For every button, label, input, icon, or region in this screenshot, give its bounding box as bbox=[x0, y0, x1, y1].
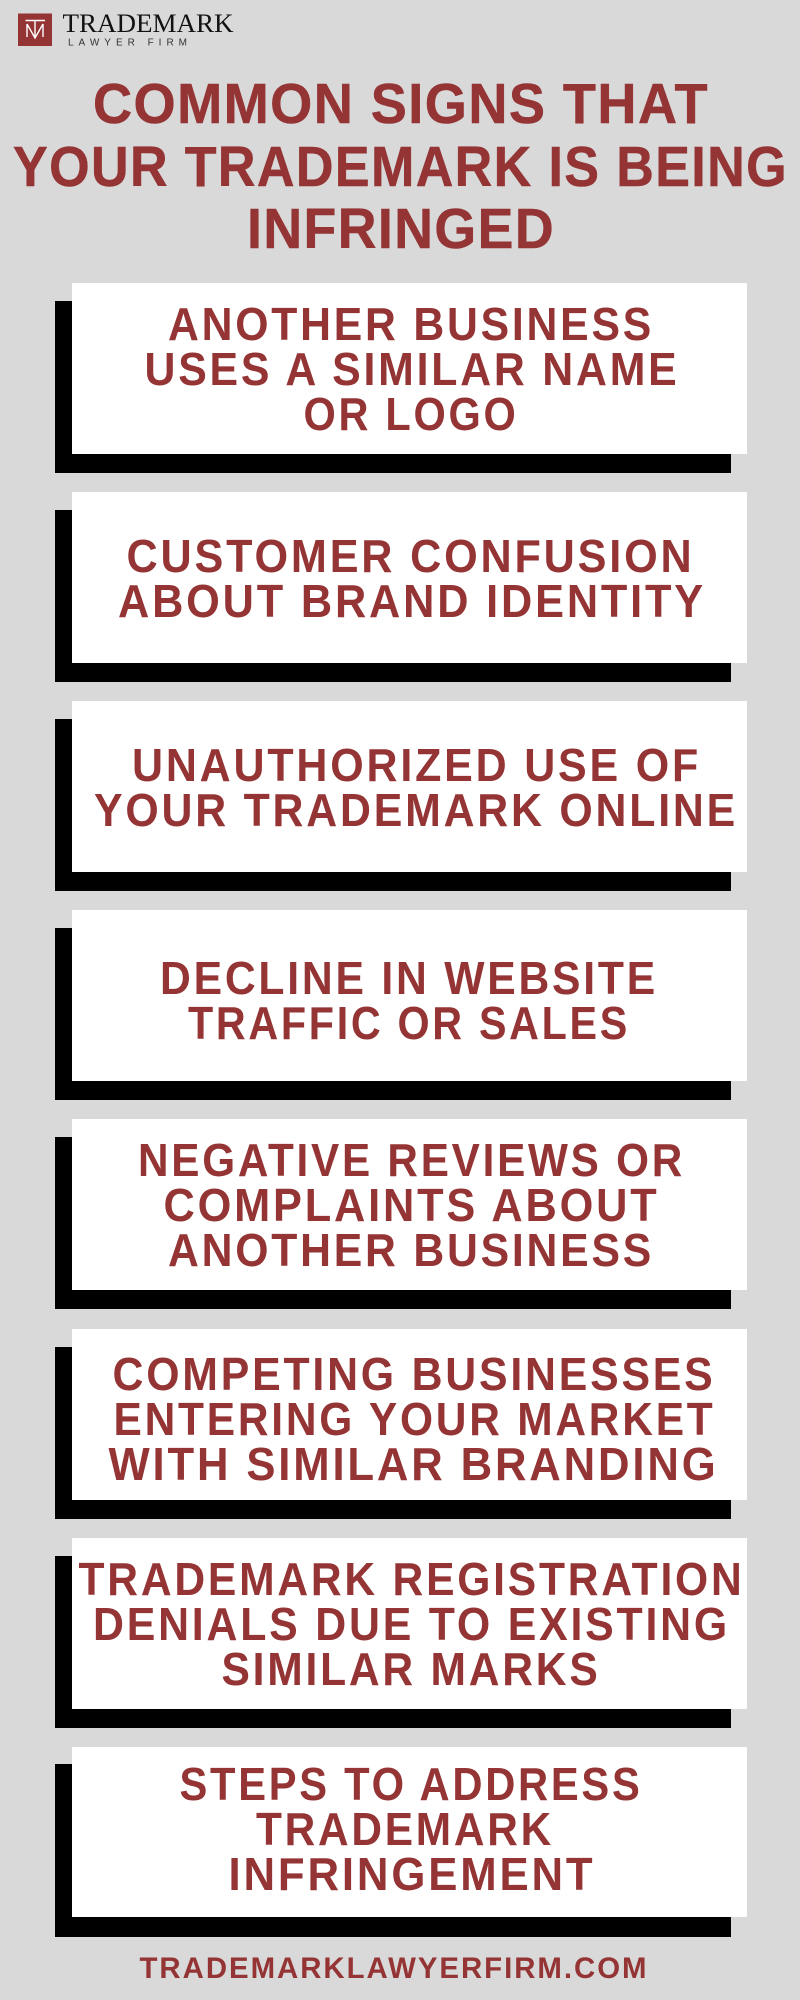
panel: unauthorized online use bbox=[55, 701, 747, 891]
panel text bbox=[160, 952, 658, 1049]
panel: similar name or logo bbox=[55, 283, 747, 473]
panel text: TRADEMARK REGISTRATION bbox=[78, 1553, 744, 1605]
panel text: INFRINGEMENT bbox=[228, 1848, 596, 1900]
panel: customer confusion bbox=[55, 492, 747, 682]
footer website: TRADEMARKLAWYERFIRM.COM bbox=[140, 1952, 648, 1985]
panel text: ANOTHER BUSINESS bbox=[168, 298, 654, 350]
panel text bbox=[144, 298, 680, 440]
panel text: STEPS TO ADDRESS bbox=[180, 1758, 642, 1810]
panel text: TRADEMARK bbox=[256, 1803, 554, 1855]
panel: negative reviews bbox=[55, 1119, 747, 1309]
panel text: DECLINE IN WEBSITE bbox=[160, 952, 658, 1004]
panel: steps to address infringement bbox=[55, 1747, 747, 1937]
panel: competing businesses bbox=[55, 1329, 747, 1519]
panel text: UNAUTHORIZED USE OF bbox=[132, 739, 701, 791]
logo wordmark: TRADEMARK bbox=[62, 9, 234, 38]
panel text: ANOTHER BUSINESS bbox=[168, 1224, 654, 1276]
title: INFRINGED bbox=[247, 197, 555, 261]
panel: registration denials bbox=[55, 1538, 747, 1728]
panel text bbox=[108, 1348, 718, 1490]
logo: Trademark Lawyer Firm bbox=[18, 9, 234, 48]
title bbox=[13, 72, 788, 261]
panel text bbox=[118, 530, 706, 627]
title: COMMON SIGNS THAT bbox=[93, 72, 709, 136]
panel text: CUSTOMER CONFUSION bbox=[126, 530, 694, 582]
panel text: USES A SIMILAR NAME bbox=[144, 343, 680, 395]
logo tagline: LAWYER FIRM bbox=[68, 38, 187, 48]
panel text: YOUR TRADEMARK ONLINE bbox=[94, 784, 738, 836]
icon: TM monogram bbox=[18, 14, 52, 46]
panel text: COMPLAINTS ABOUT bbox=[164, 1179, 660, 1231]
panel: decline in traffic or sales bbox=[55, 910, 747, 1100]
panel text bbox=[94, 739, 738, 836]
panel text bbox=[180, 1758, 642, 1900]
panel text: TRAFFIC OR SALES bbox=[188, 997, 630, 1049]
panel text: ABOUT BRAND IDENTITY bbox=[118, 575, 706, 627]
panel text: WITH SIMILAR BRANDING bbox=[108, 1438, 718, 1490]
panel text: ENTERING YOUR MARKET bbox=[114, 1393, 716, 1445]
panel text bbox=[138, 1134, 685, 1276]
panel text: NEGATIVE REVIEWS OR bbox=[138, 1134, 685, 1186]
panel text: COMPETING BUSINESSES bbox=[112, 1348, 716, 1400]
panel text: DENIALS DUE TO EXISTING bbox=[93, 1598, 730, 1650]
panel text: OR LOGO bbox=[304, 388, 518, 440]
panel text: SIMILAR MARKS bbox=[222, 1643, 600, 1695]
panel text bbox=[78, 1553, 744, 1695]
